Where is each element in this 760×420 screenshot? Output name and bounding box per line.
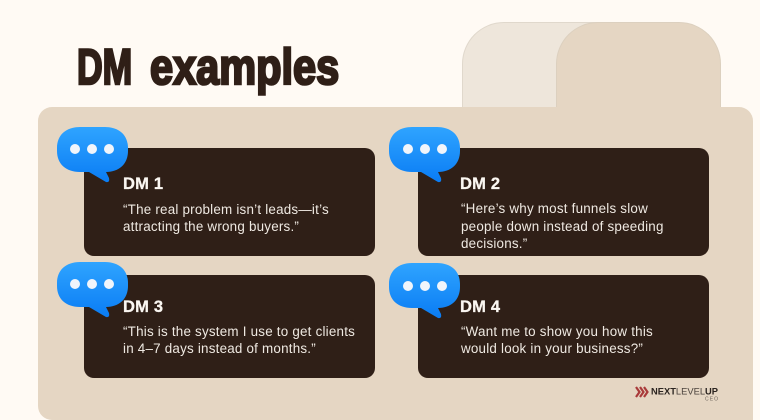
icon: chat bubble 1 xyxy=(57,127,128,182)
title: DM xyxy=(77,39,132,95)
text: DM 3 message: “This is the system I use to get clients xyxy=(123,324,355,338)
text: DM 3 message: in 4–7 days instead of months.” xyxy=(123,341,316,356)
text: DM 2 message: people down instead of speeding xyxy=(461,218,664,234)
icon: chat bubble 4 xyxy=(389,263,460,318)
text: DM 1 message: attracting the wrong buyers.” xyxy=(123,219,299,234)
heading: DM 2: DM 2 xyxy=(460,175,500,193)
text: DM 2 message: decisions.” xyxy=(461,236,527,251)
text: DM 2 message xyxy=(461,201,664,251)
decorative tab: light back tab xyxy=(462,22,682,122)
decorative tab: front tab xyxy=(556,22,721,122)
card: DM 4 xyxy=(418,275,709,378)
title: examples xyxy=(150,39,339,95)
card: DM 1 xyxy=(84,148,375,256)
heading: DM 3: DM 3 xyxy=(123,298,163,316)
icon: logo chevrons xyxy=(636,387,648,397)
heading: DM 4: DM 4 xyxy=(460,298,500,316)
heading: DM 1: DM 1 xyxy=(123,175,163,193)
text: DM 4 message: “Want me to show you how this xyxy=(461,324,653,338)
icon: chat bubble 3 xyxy=(57,262,128,318)
main panel xyxy=(38,107,753,420)
text: DM 1 message xyxy=(123,202,329,234)
icon: chat bubble 2 xyxy=(389,127,460,182)
logo: Next Level Up CEO xyxy=(635,386,719,402)
text: DM 2 message: “Here’s why most funnels slow xyxy=(461,201,648,216)
text: DM 1 message: “The real problem isn’t leads—it’s xyxy=(123,202,329,216)
text: logo wordmark: NEXTLEVELUP xyxy=(651,386,719,398)
card: DM 2 xyxy=(418,148,709,256)
card: DM 3 xyxy=(84,275,375,378)
text: DM 4 message xyxy=(461,324,653,356)
text: DM 3 message xyxy=(123,324,355,356)
text: DM 4 message: would look in your business?” xyxy=(461,341,643,356)
